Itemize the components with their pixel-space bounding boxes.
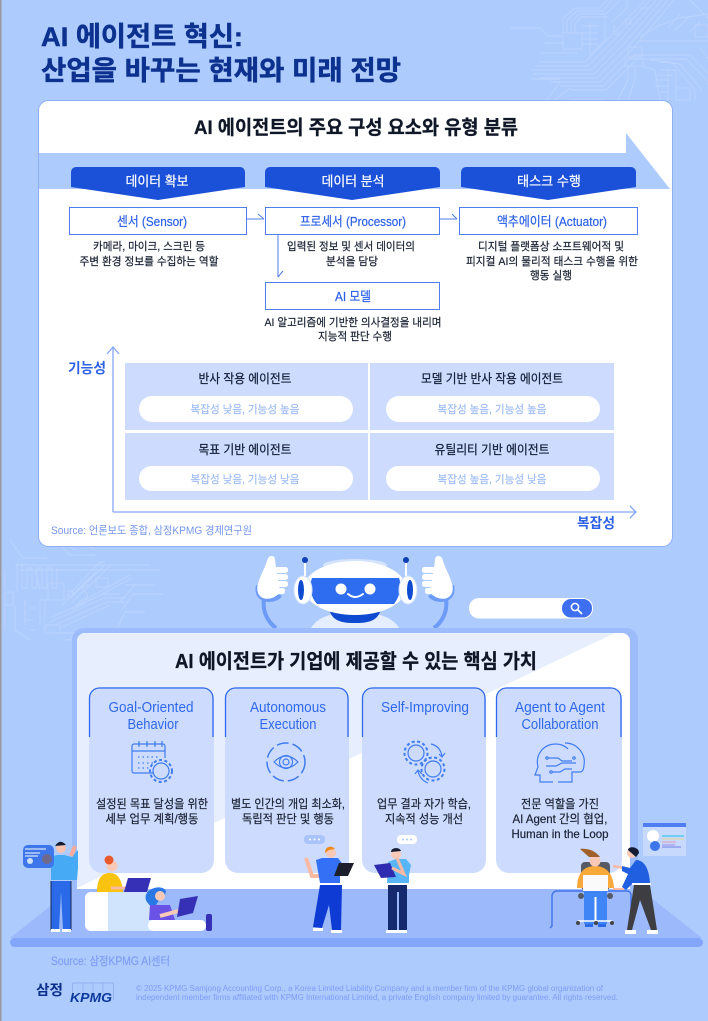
logo: Samjong KPMG: KPMG xyxy=(70,990,112,1005)
matrix x axis xyxy=(113,506,636,518)
sensor box: 센서 (Sensor) xyxy=(117,214,187,229)
card: self-improving: 지속적 성능 개선 xyxy=(385,812,463,826)
card: agent to agent collaboration: AI Agent 간의 협업, xyxy=(512,812,608,826)
person: man presenting with tablet xyxy=(304,835,354,933)
AI model description xyxy=(264,315,442,343)
person and sofa: woman with laptop xyxy=(85,856,155,931)
logo: Samjong KPMG xyxy=(36,982,114,1005)
step banner: task execution xyxy=(461,167,636,200)
icon: two heads with circuits xyxy=(535,743,584,782)
actuator box: 액추에이터 (Actuator) xyxy=(497,214,607,229)
y axis label: 기능성 xyxy=(68,360,106,376)
card: self-improving: Self-Improving xyxy=(381,699,469,716)
card: agent to agent collaboration: Human in the Loop xyxy=(512,827,609,841)
person: man thinking with clipboard xyxy=(374,835,417,933)
matrix cell: model-based reflex agent: 모델 기반 반사 작용 에이전트 xyxy=(421,372,563,386)
sensor description: 주변 환경 정보를 수집하는 역할 xyxy=(80,254,218,268)
sensor box xyxy=(70,208,246,234)
person: man with floating screen xyxy=(23,842,78,932)
step banner: data analysis xyxy=(265,167,440,200)
matrix cell: utility-based agent xyxy=(370,433,614,500)
panel heading: AI 에이전트의 주요 구성 요소와 유형 분류 xyxy=(194,117,518,139)
AI model description: 지능적 판단 수행 xyxy=(318,330,392,343)
matrix cell: goal-based agent xyxy=(125,433,368,500)
circuit pattern bottom left xyxy=(5,540,163,640)
matrix y axis xyxy=(107,347,119,512)
card: agent to agent collaboration: Agent to Agent xyxy=(515,699,606,716)
step banner: data analysis: 데이터 분석 xyxy=(322,174,384,189)
arrow: sensor to processor xyxy=(246,214,264,219)
card: goal-oriented behavior: 설정된 목표 달성을 위한 xyxy=(96,797,208,811)
title xyxy=(41,22,401,86)
matrix cell: reflex agent xyxy=(125,363,368,430)
matrix cell: goal-based agent: 목표 기반 에이전트 xyxy=(198,443,292,457)
matrix cell: utility-based agent: 유틸리티 기반 에이전트 xyxy=(434,443,550,457)
step banner: data acquisition: 데이터 확보 xyxy=(126,174,188,189)
person: man pointing xyxy=(613,847,658,934)
sensor description: 카메라, 마이크, 스크린 등 xyxy=(93,240,205,253)
actuator description xyxy=(466,240,638,282)
matrix cell: utility-based agent: 복잡성 높음, 기능성 낮음 xyxy=(438,473,546,486)
actuator description: 피지컬 AI의 물리적 태스크 수행을 위한 xyxy=(466,255,638,268)
processor box: 프로세서 (Processor) xyxy=(300,214,406,229)
arrow: processor to actuator xyxy=(440,214,457,219)
card: agent to agent collaboration xyxy=(496,687,622,873)
floor platform xyxy=(10,889,703,947)
card: goal-oriented behavior: Behavior xyxy=(128,716,179,733)
arrow: processor to AI model xyxy=(278,235,283,277)
desk outline xyxy=(550,891,631,928)
panel: components and agent types xyxy=(38,100,672,546)
processor description: 입력된 정보 및 센서 데이터의 xyxy=(287,240,415,253)
logo: Samjong KPMG: 삼정 xyxy=(36,982,63,998)
circuit pattern top right xyxy=(510,0,708,100)
actuator description: 행동 실행 xyxy=(530,269,572,282)
card: autonomous execution: Autonomous xyxy=(250,699,326,716)
card: goal-oriented behavior xyxy=(89,687,214,873)
card: agent to agent collaboration: Collaboration xyxy=(522,716,598,733)
bottom source note: Source: 삼정KPMG AI센터 xyxy=(51,955,170,968)
copyright xyxy=(136,984,618,1002)
matrix cell: model-based reflex agent xyxy=(370,363,614,430)
copyright: independent member firms affiliated with KPMG International Limited, a private English company limited by guarantee. All rights reserved. xyxy=(136,993,618,1002)
robot illustration xyxy=(256,556,454,628)
matrix cell: reflex agent: 반사 작용 에이전트 xyxy=(198,372,292,386)
AI model box xyxy=(266,282,440,310)
card: self-improving xyxy=(362,687,486,873)
step banner: task execution: 태스크 수행 xyxy=(517,174,581,189)
person: woman lying with tablet xyxy=(146,887,212,931)
process arrow band xyxy=(39,133,670,189)
title: 산업을 바꾸는 현재와 미래 전망 xyxy=(41,56,401,86)
search bar xyxy=(469,598,593,618)
panel: core values xyxy=(72,628,638,889)
icon: eye with orbit xyxy=(267,743,305,781)
processor description xyxy=(287,240,415,268)
card: autonomous execution: 독립적 판단 및 행동 xyxy=(242,811,334,826)
title: AI 에이전트 혁신: xyxy=(41,22,243,52)
card: autonomous execution xyxy=(225,687,349,873)
step banner: data acquisition xyxy=(71,167,245,200)
card: agent to agent collaboration: 전문 역할을 가진 xyxy=(521,797,599,811)
card: autonomous execution: Execution xyxy=(260,716,316,733)
matrix cell: goal-based agent: 복잡성 낮음, 기능성 낮음 xyxy=(190,473,300,486)
source note: Source: 언론보도 종합, 삼정KPMG 경제연구원 xyxy=(51,524,252,537)
sensor description xyxy=(80,240,218,268)
x axis label: 복잡성 xyxy=(577,515,615,531)
icon: calendar and gear xyxy=(132,741,172,782)
card: goal-oriented behavior: 세부 업무 계획/행동 xyxy=(106,811,198,826)
panel heading: AI 에이전트가 기업에 제공할 수 있는 핵심 가치 xyxy=(175,650,537,673)
copyright: © 2025 KPMG Samjong Accounting Corp., a Korea Limited Liability Company and a member firm of the KPMG global organization of xyxy=(136,984,604,993)
icon: two gears with arrows xyxy=(404,742,445,783)
matrix cell: model-based reflex agent: 복잡성 높음, 기능성 높음 xyxy=(438,403,546,416)
processor description: 분석을 담당 xyxy=(326,255,378,268)
card: autonomous execution: 별도 인간의 개입 최소화, xyxy=(231,797,345,811)
AI model description: AI 알고리즘에 기반한 의사결정을 내리며 xyxy=(264,315,442,329)
matrix cell: reflex agent: 복잡성 낮음, 기능성 높음 xyxy=(190,403,300,416)
card: goal-oriented behavior: Goal-Oriented xyxy=(108,699,194,716)
person: woman on chair with laptop xyxy=(576,849,614,927)
AI model box: AI 모델 xyxy=(335,289,371,304)
card: self-improving: 업무 결과 자가 학습, xyxy=(377,797,471,811)
actuator box xyxy=(460,208,638,234)
processor box xyxy=(266,208,440,234)
floating browser window xyxy=(643,823,686,856)
actuator description: 디지털 플랫폼상 소프트웨어적 및 xyxy=(478,240,624,253)
